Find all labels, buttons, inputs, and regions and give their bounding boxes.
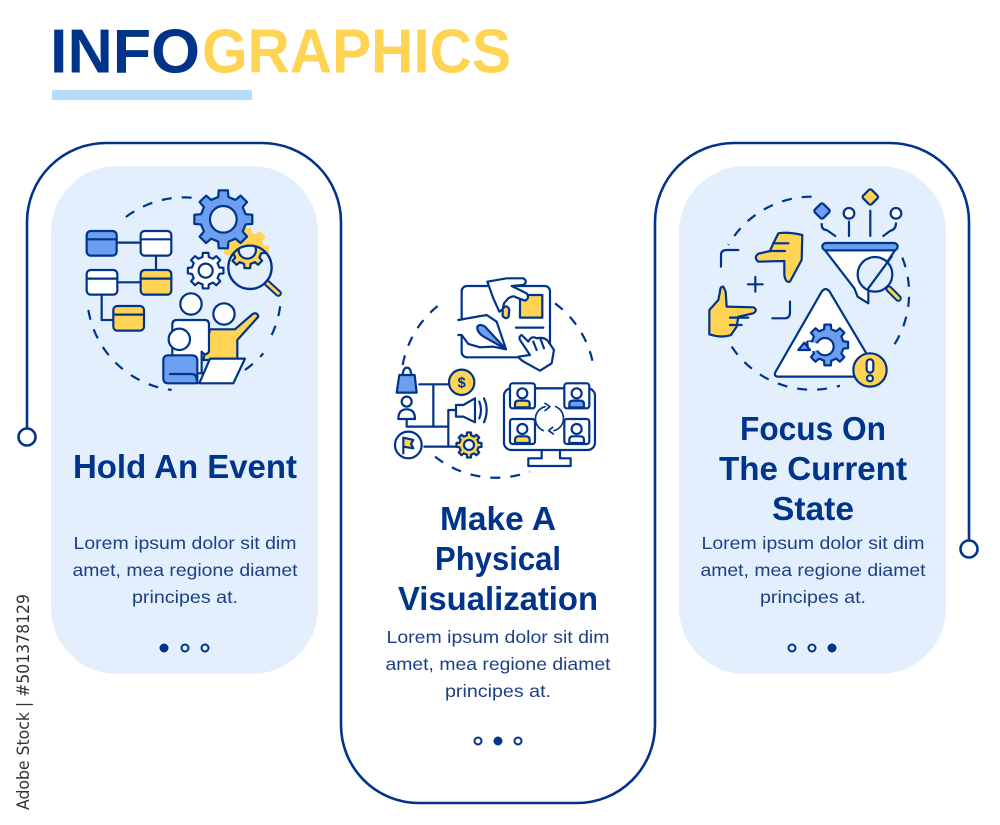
heading: make a physical visualization: Physical: [435, 540, 561, 577]
title: INFO: [50, 18, 200, 86]
heading: focus on the current state: State: [772, 490, 854, 527]
text block: right description: Lorem ipsum dolor sit dim: [702, 533, 924, 553]
title underline: [52, 90, 252, 100]
text block: left description: amet, mea regione diamet: [72, 560, 298, 580]
heading: make a physical visualization: Visualization: [398, 580, 598, 617]
text block: right description: principes at.: [760, 587, 866, 607]
icon: make a physical visualization: [395, 278, 595, 478]
text block: middle description: [386, 627, 611, 701]
watermark credit: Adobe Stock | #501378129: [14, 594, 34, 810]
text block: right description: [700, 533, 926, 607]
text block: left description: Lorem ipsum dolor sit dim: [74, 533, 296, 553]
text block: right description: amet, mea regione diamet: [700, 560, 926, 580]
text block: left description: [72, 533, 298, 607]
connecting outline: [18, 143, 978, 803]
text block: left description: principes at.: [132, 587, 238, 607]
title: GRAPHICS: [202, 18, 511, 86]
title: [50, 18, 511, 86]
panel: left background: [51, 166, 318, 674]
heading: focus on the current state: Focus On: [740, 410, 886, 447]
text block: middle description: Lorem ipsum dolor sit dim: [386, 627, 610, 647]
heading: hold an event: Hold An Event: [73, 448, 297, 485]
pagination dots: middle: [474, 738, 522, 744]
heading: make a physical visualization: [398, 500, 598, 617]
panel: right background: [679, 166, 946, 674]
icon: make a physical visualization: $: [458, 375, 466, 391]
text block: middle description: amet, mea regione diamet: [386, 654, 611, 674]
heading: focus on the current state: The Current: [719, 450, 907, 487]
text block: middle description: principes at.: [445, 681, 551, 701]
pagination dots: left: [160, 644, 208, 652]
heading: make a physical visualization: Make A: [440, 500, 556, 537]
icon: hold an event: [87, 190, 281, 390]
heading: focus on the current state: [719, 410, 907, 527]
icon: focus on the current state: [709, 189, 909, 390]
pagination dots: right: [788, 644, 836, 652]
